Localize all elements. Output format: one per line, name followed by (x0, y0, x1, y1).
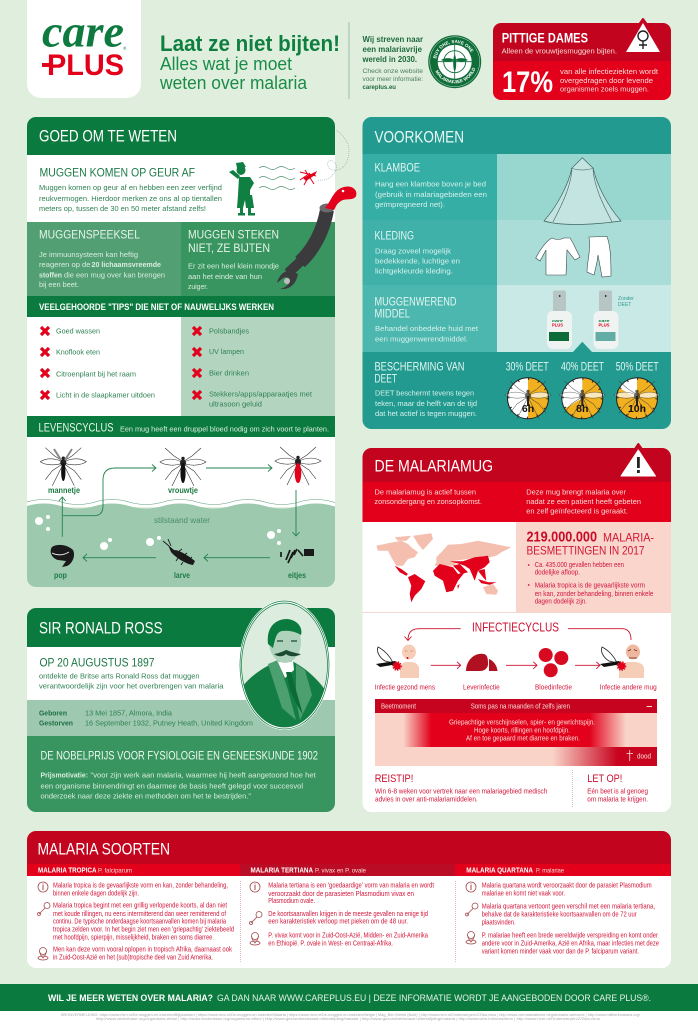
icon: mosquito net (544, 158, 621, 224)
icon: warning triangle (621, 450, 656, 476)
subheading: Alleen de vrouwtjesmuggen bijten. (502, 47, 617, 56)
text block: muggenspeeksel: reageren op de (39, 260, 90, 269)
bullet list: en kan, zonder behandeling, binnen enkele (535, 590, 653, 598)
badge: malaria-free world: BUY ONE, SAVE ONE (433, 40, 474, 58)
column: malaria quartana: plaatsvinden. (482, 919, 516, 927)
birth and death dates: 13 Mei 1857, Almora, India (85, 709, 173, 718)
timeline: Griepachtige verschijnselen, spier- en gewrichtspijn. (449, 717, 595, 726)
divider (348, 22, 350, 99)
icon: info (466, 882, 476, 892)
text block: bescherming van deet: DEET beschermt tevens tegen (375, 389, 474, 398)
birth and death dates: Gestorven (39, 719, 73, 728)
list: ineffective tips left (41, 327, 155, 400)
statistic: 17% (502, 66, 553, 99)
column: malaria tertiana: P. vivax komt voor in Zuid-Oost-Azië, Midden- en Zuid-Amerika (268, 932, 428, 940)
column: malaria tropica: in Zuid-Oost-Azië en het (sub)tropische deel van Zuid Amerika. (53, 954, 213, 962)
list: ineffective tips right: Stekkers/apps/apparaatjes met (209, 390, 313, 399)
text block: muggen komen op geur af: reukvermogen. Hierdoor merken ze ons al op tientallen (39, 194, 222, 203)
column: malaria tropica: met hoofdpijn, spierpijn, misselijkheid, braken en soms diarree. (53, 934, 214, 942)
text block: muggen komen op geur af: MUGGEN KOMEN OP GEUR AF (40, 168, 195, 180)
life cycle: eggs: eitjes (288, 571, 306, 580)
list: ineffective tips left: Knoflook eten (56, 348, 100, 357)
dotted dividers (240, 881, 456, 963)
title: Laat ze niet bijten! (160, 31, 340, 56)
statistic: 219 million infections: MALARIA- (603, 533, 654, 545)
timeline: Hoge koorts, rillingen en hoofdpijn. (474, 725, 570, 734)
icon: spray bottle with DEET: PLUS (552, 322, 563, 328)
sources: http://www.vectorbase.org/organisms-ethiol | http://www.vectorbase.org/organisms-ethiol | http://www.gezondheidsraad.nl/bestrijding/malaria | http://www.gezondheidsraad.nl/bestrijding/malaria | http://www.who.int/news/item | http://www.rivm.nl/Onderwerpen/Z/Zika-virus (96, 1017, 600, 1021)
text block: bescherming van deet: DEET (374, 373, 397, 385)
text block: muggen steken niet: zuiger. (188, 282, 208, 291)
text block: muggen steken niet: MUGGEN STEKEN (188, 230, 279, 242)
text block: muggenwerend middel (374, 297, 479, 343)
tips header: VEELGEHOORDE "TIPS" DIE NIET OF NAUWELIJKS WERKEN (39, 302, 274, 312)
timeline: Beetmoment (381, 701, 417, 710)
life cycle: pupa (51, 545, 74, 580)
list: ineffective tips left: Citroenplant bij het raam (56, 370, 136, 379)
icon: thermometer (250, 912, 262, 924)
column: malaria tropica: continu. De typische onderdaagse koortsaanvallen komen bij malaria (53, 918, 226, 926)
panel: goed om te weten (27, 117, 367, 590)
icon: female sign (626, 23, 660, 52)
life cycle: eggs (281, 549, 314, 580)
text block: muggenspeeksel: die een mug over kan brengen (64, 270, 165, 279)
clock: 30% DEET 6h: 30% DEET (506, 361, 549, 373)
column: malaria tropica: met koude rillingen, nu eens intermitterend dan weer remitterend of (53, 910, 226, 918)
life cycle: female mosquito (160, 448, 206, 495)
text block: muggen steken niet (188, 230, 279, 291)
heading: GOED OM TE WETEN (39, 128, 177, 146)
panel: sir ronald ross (27, 600, 335, 812)
column: malaria quartana: P. malariae (536, 868, 564, 875)
heading: PITTIGE DAMES (502, 31, 588, 46)
column: malaria quartana: malariae en komt niet vaak voor. (482, 889, 565, 897)
nobel prize: onderzoek naar deze ziekte en methoden om het te bestrijden." (40, 792, 251, 801)
heading: VOORKOMEN (374, 129, 464, 147)
icon: map pin (250, 932, 260, 945)
text block: bescherming van deet: dat het actief is tegen muggen. (375, 409, 477, 418)
column: malaria tropica: tropica zelden voor. In het begin ziet men een 'griepachtig' ziektebeeld (53, 926, 234, 934)
timeline: Af en toe gepaard met diarree en braken. (466, 734, 580, 743)
clock: 50% DEET 10h (614, 361, 660, 419)
panel: malaria soorten (27, 831, 671, 968)
clock: 40% DEET 8h: 40% DEET (561, 361, 604, 373)
text block: muggen steken niet: Er zit een heel klein mondje (188, 262, 279, 271)
infection cycle labels: Bloedinfectie (535, 682, 572, 691)
timeline: Soms pas na maanden of zelfs jaren (471, 701, 570, 710)
logo: Care Plus: PLUS (47, 49, 124, 82)
text block: muggen komen op geur af: Muggen komen op geur af en hebben een zeer verfijnd (39, 183, 222, 192)
text block: kleding (374, 230, 460, 276)
icon: spray bottle without DEET: PLUS (598, 322, 610, 328)
column: malaria tertiana: De koortsaanvallen krijgen in de meeste gevallen na enige tijd (268, 910, 428, 918)
column: malaria tropica: Malaria tropica is de gevaarlijkste vorm en kan, zonder behandeling, (53, 882, 228, 890)
list: ineffective tips left: Goed wassen (56, 327, 100, 336)
column: malaria tropica: P. falciparum (98, 868, 132, 875)
logo: Care Plus (27, 0, 141, 98)
life cycle header: LEVENSCYCLUS (38, 423, 114, 435)
list: ineffective tips right (193, 327, 313, 409)
text block: muggen steken niet: aan het einde van hun (188, 272, 262, 281)
icon: map pin (466, 932, 476, 944)
text block: klamboe: geïmpregneerd net). (375, 200, 445, 209)
column: malaria tertiana: veroorzaakt door de parasieten Plasmodium vivax en (268, 890, 414, 898)
warning note: Eén beet is al genoeg (587, 788, 648, 796)
life cycle: larva: larve (174, 571, 190, 580)
icon: thermometer (38, 902, 50, 916)
nobel prize: Prijsmotivatie: (40, 771, 88, 780)
arrow (575, 662, 600, 669)
logo: Care Plus: care (42, 6, 124, 56)
icon: smell waves (259, 166, 295, 190)
column: malaria quartana: andere voor in Zuid-Amerika, Azië en Afrika, maar infecties met deze (482, 940, 659, 948)
list: ineffective tips right: UV lampen (209, 347, 244, 356)
column: malaria tertiana (250, 866, 434, 948)
icon: mosquito proboscis (277, 187, 356, 289)
icon: long-sleeved shirt (536, 238, 580, 275)
warning note: om malaria te krijgen. (587, 795, 648, 803)
list: ineffective tips left: Licht in de slaapkamer uitdoen (56, 391, 155, 400)
clock: 30% DEET 6h (505, 361, 551, 419)
column: malaria tertiana: Plasmodium ovale. (268, 897, 315, 905)
title: Alles wat je moet (160, 54, 292, 74)
column: malaria tropica: Men kan deze vorm vooral oplopen in tropisch Afrika, daarnaast ook (53, 946, 232, 954)
column: malaria tropica: binnen enkele dagen dodelijk zijn. (53, 889, 139, 897)
icon: spray bottle with DEET (547, 290, 572, 349)
statistic caption: overgedragen door levende (560, 76, 653, 85)
column: malaria quartana: Malaria quartana vertoont geen verschil met een malaria tertiana, (482, 902, 655, 910)
statistic: 219 million infections: 219.000.000 (526, 529, 597, 546)
text: transmission: nadat ze een patient heeft gebeten (526, 497, 641, 506)
flight path (318, 130, 349, 180)
column: malaria quartana: MALARIA QUARTANA (466, 866, 533, 875)
clock: 40% DEET 8h: 8h (576, 403, 588, 415)
statistic caption: van alle infectieziekten wordt (560, 67, 659, 76)
text block: klamboe: Hang een klamboe boven je bed (375, 180, 486, 189)
mission statement: Wij streven naar (362, 34, 424, 44)
text block: muggenwerend middel: MUGGENWEREND (374, 297, 456, 309)
column: malaria quartana: Malaria quartana wordt veroorzaakt door de parasiet Plasmodium (482, 882, 652, 890)
text: active time: zonsondergang en zonsopkomst. (374, 497, 482, 506)
discovery text: ontdekte de Britse arts Ronald Ross dat muggen (39, 671, 200, 680)
bullet list: Malaria tropica is de gevaarlijkste vorm (535, 581, 645, 589)
discovery text: OP 20 AUGUSTUS 1897 (40, 658, 154, 670)
title (159, 31, 340, 93)
text block: kleding: KLEDING (374, 230, 414, 242)
bubbles (35, 515, 281, 550)
heading: MALARIA SOORTEN (38, 840, 170, 858)
mission statement: wereld in 2030. (362, 54, 417, 64)
statistic: 219 million infections: BESMETTINGEN IN 2017 (526, 543, 645, 557)
text: active time (374, 488, 482, 506)
list: ineffective tips right: Bier drinken (209, 368, 249, 377)
life cycle arrows (59, 464, 299, 561)
clock: 50% DEET 10h: 10h (628, 403, 646, 415)
text block: klamboe: (gebruik in malariagebieden een (375, 190, 487, 199)
column: malaria quartana: P. malariae heeft een brede wereldwijde verspreiding en komt onder (482, 932, 659, 940)
column: malaria quartana (466, 866, 659, 956)
travel tip: Win 6-8 weken voor vertrek naar een malariagebied medisch (375, 788, 547, 796)
clock: 40% DEET 8h (559, 361, 605, 419)
discovery text (39, 658, 224, 690)
nobel prize (40, 750, 318, 801)
text block: muggenspeeksel: MUGGENSPEEKSEL (39, 230, 141, 242)
badge: malaria-free world (428, 35, 482, 88)
text block: muggenspeeksel: 20 lichaamsvreemde (92, 260, 161, 269)
arrow (506, 662, 537, 669)
text: transmission: Deze mug brengt malaria over (526, 488, 626, 497)
travel tip (375, 773, 547, 803)
dotted divider (572, 770, 574, 808)
infection cycle labels (375, 682, 657, 691)
icon: spray bottle with DEET: care (552, 318, 564, 323)
heading: SIR RONALD ROSS (39, 619, 162, 637)
title: weten over malaria (159, 73, 308, 93)
discovery text: verantwoordelijk zijn voor het overbrengen van malaria (39, 681, 224, 690)
life cycle: female mosquito: vrouwtje (168, 486, 198, 495)
divider (362, 612, 671, 613)
mission statement: Check onze website (362, 68, 423, 75)
bullet list: Ca. 435.000 gevallen hebben een (535, 561, 624, 569)
footer banner (0, 984, 698, 1011)
list: ineffective tips right: ultrasoon geluid (209, 400, 262, 409)
label: standing water: stilstaand water (154, 516, 210, 525)
text block: muggen komen op geur af: meters op, tussen de 30 en 50 meter afstand zelfs! (39, 204, 206, 213)
travel tip: advies in over anti-malariamiddelen. (375, 795, 478, 803)
infection cycle labels: Infectie gezond mens (375, 682, 435, 691)
text: transmission: en zelf geïnfecteerd is geraakt. (526, 506, 628, 515)
life cycle header (38, 423, 329, 435)
panel: voorkomen (362, 117, 672, 429)
bullet list: dagen dodelijk zijn. (535, 598, 587, 606)
infection cycle labels: Infectie andere mug (600, 682, 657, 691)
text block: bescherming van deet (374, 361, 477, 418)
text block: klamboe: KLAMBOE (374, 163, 420, 175)
infection cycle heading: INFECTIECYCLUS (472, 620, 559, 635)
warning note (587, 773, 648, 803)
arrow (431, 662, 461, 669)
icon: man smelling (229, 162, 255, 216)
nobel prize: een organisme binnendringt en daarmee de basis heeft gelegd voor succesvol (40, 782, 303, 791)
text block: muggenwerend middel: Behandel onbedekte huid met (375, 324, 479, 333)
text block: klamboe (374, 163, 487, 209)
notch (573, 342, 592, 352)
icon: info (250, 882, 260, 892)
life cycle header: Een mug heeft een druppel bloed nodig om zich voort te planten. (120, 424, 329, 433)
text block: muggenspeeksel (39, 230, 165, 289)
icon: blood cells (539, 648, 568, 677)
bullet list (528, 561, 653, 606)
icon: long trousers (587, 236, 611, 277)
column: malaria tertiana: een karakteristiek verloop met pieken om de 48 uur. (268, 918, 408, 926)
mission statement (362, 34, 424, 91)
clock: 50% DEET 10h: 50% DEET (616, 361, 659, 373)
statistic: 219 million infections (526, 529, 654, 557)
birth and death dates (39, 709, 253, 728)
arrows: cycle return (404, 629, 631, 640)
portrait (239, 600, 330, 730)
column: malaria tertiana: P. vivax en P. ovale (315, 868, 366, 875)
text block: muggenwerend middel: MIDDEL (374, 308, 410, 320)
text block: kleding: Draag zoveel mogelijk (375, 246, 451, 255)
clock: 30% DEET 6h: 6h (522, 403, 534, 415)
heading: DE MALARIAMUG (374, 458, 493, 476)
nobel prize: DE NOBELPRIJS VOOR FYSIOLOGIE EN GENEESKUNDE 1902 (40, 750, 318, 762)
text block: kleding: bedekkende, luchtige en (375, 256, 460, 265)
icon: infected person and mosquito (600, 644, 644, 678)
icon: liver (466, 654, 498, 671)
footer banner: WIL JE MEER WETEN OVER MALARIA? (48, 993, 213, 1004)
column: malaria tertiana: Malaria tertiana is een 'goedaardige' vorm van malaria en wordt (268, 882, 434, 890)
birth and death dates: 16 September 1932, Putney Heath, United Kingdom (85, 719, 253, 728)
text block: muggenspeeksel: stoffen (39, 270, 62, 279)
icon: infected healthy person (376, 644, 419, 678)
world map (376, 533, 511, 602)
text block: kleding: lichtgekleurde kleding. (375, 267, 453, 276)
text block: muggenspeeksel: bij een beet. (39, 280, 79, 289)
warning peak (638, 19, 648, 26)
icon: red mosquito (300, 170, 317, 185)
timeline: dood (637, 752, 651, 761)
bullet list: dodelijke afloop. (535, 569, 580, 577)
text: transmission (526, 488, 641, 515)
text: active time: De malariamug is actief tussen (374, 488, 476, 497)
sources (0, 1011, 698, 1024)
column: malaria tertiana: en Ethiopië. P. ovale in West- en Centraal-Afrika. (268, 940, 393, 948)
mission statement: een malariavrije (362, 44, 422, 54)
statistic caption (560, 67, 659, 94)
travel tip: REISTIP! (375, 773, 413, 785)
list: ineffective tips right: Polsbandjes (209, 327, 249, 336)
icon: spray bottle without DEET: DEET (618, 302, 631, 308)
statistic caption: organismen zoels muggen. (560, 85, 649, 94)
text block: muggenwerend middel: een muggenwerendmiddel. (375, 334, 468, 343)
panel: pittige dames (493, 19, 671, 100)
text block: bescherming van deet: teken, maar de helft van de tijd (375, 399, 477, 408)
mission statement: voor meer informatie: (362, 76, 423, 83)
badge: malaria-free world: MALARIAFREE WORLD (435, 68, 475, 84)
column: malaria quartana: behalve dat de karakteristieke koortsaanvallen om de 72 uur (482, 911, 637, 919)
timeline (375, 699, 657, 766)
column: malaria tertiana: MALARIA TERTIANA (250, 866, 313, 875)
text block: muggen komen op geur af (39, 168, 222, 213)
panel: de malariamug (362, 444, 672, 812)
column: malaria tropica: MALARIA TROPICA (38, 866, 97, 875)
text block: muggen steken niet: NIET, ZE BIJTEN (188, 243, 270, 255)
birth and death dates: Geboren (39, 709, 67, 718)
warning note: LET OP! (587, 773, 622, 785)
life cycle: male mosquito (40, 448, 86, 495)
column: malaria tropica: Malaria tropica begint met een grillig verlopende koorts, al dan niet (53, 902, 227, 910)
life cycle: male mosquito: mannetje (48, 486, 80, 495)
text block: muggenspeeksel: Je immuunsysteem kan heftig (39, 250, 138, 259)
life cycle: pupa: pop (54, 571, 67, 580)
logo: Care Plus: ® (123, 45, 127, 51)
life cycle: larva (163, 539, 195, 580)
infection cycle labels: Leverinfectie (463, 682, 500, 691)
column: malaria quartana: variant komen minder vaak voor dan de P. falciparum variant. (482, 948, 639, 956)
icon: map pin (38, 948, 48, 960)
icon: spray bottle without DEET (594, 290, 634, 349)
footer banner: GA DAN NAAR WWW.CAREPLUS.EU | DEZE INFORMATIE WORDT JE AANGEBODEN DOOR CARE PLUS®. (217, 993, 651, 1004)
icon: info (38, 882, 48, 892)
text block: bescherming van deet: BESCHERMING VAN (374, 361, 464, 373)
icon: thermometer (466, 903, 478, 916)
nobel prize: "voor zijn werk aan malaria, waarmee hij heeft aangetoond hoe het (90, 771, 317, 780)
icon: spray bottle without DEET: care (598, 318, 611, 323)
icon: spray bottle without DEET: Zonder (618, 296, 634, 302)
mission statement: careplus.eu (362, 84, 396, 91)
life cycle: blood-fed mosquito (275, 447, 321, 485)
sources: BRONVERMELDING: https://www.rivm.nl/De-muggen-en-insecten/Bijtplaatsen | https://www.rivm.nl/De-muggen-en-insecten/Malaria | https://www.rivm.nl/De-muggen-en-insecten/Belgie | Mag_Ben Kleefs (Bubi) | http://www.rivm.nl/Onderwerpen/Z/Zika-virus | http://www.vermalariatreine.nl/gids/starts-welcome | http://www.mlifkerkmalaria.org/ (61, 1013, 640, 1017)
column: malaria tropica (38, 866, 234, 962)
